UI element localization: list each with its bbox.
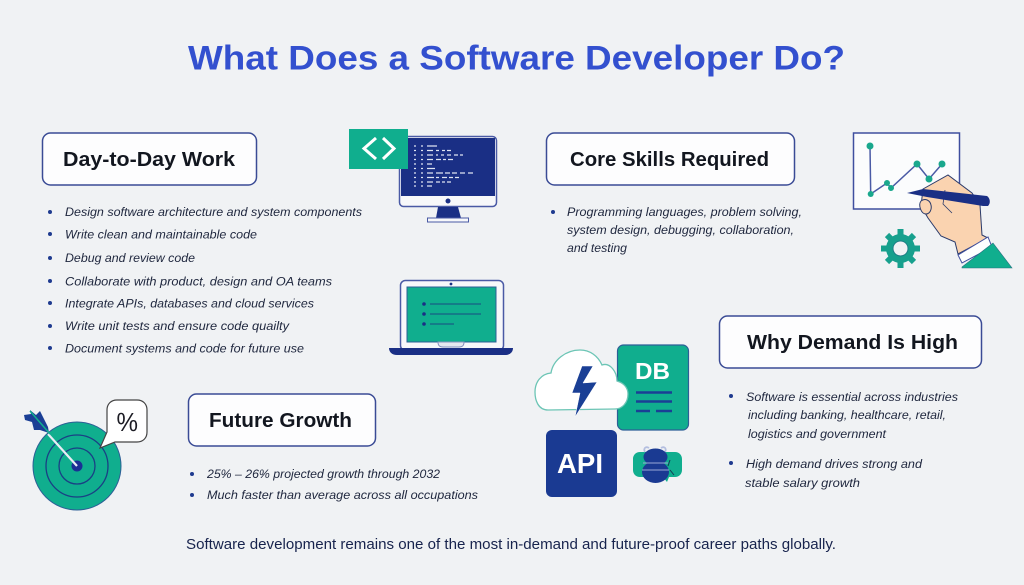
- panel: day-to-day work: [42, 133, 362, 356]
- bullet: salary growth: [729, 457, 923, 490]
- icon: cloud, database, API and bug: API: [557, 448, 603, 479]
- heading: future growth: Future Growth: [209, 409, 352, 432]
- bullet list: daily tasks: Collaborate with product, design and OA teams: [65, 274, 332, 288]
- icon: target with arrow and percent bubble: %: [116, 407, 138, 437]
- bullet list: growth facts: [190, 467, 478, 502]
- bullet: skills list: system design, debugging, collaboration,: [567, 223, 794, 237]
- panel: core skills required: [546, 133, 802, 255]
- heading: why demand is high: Why Demand Is High: [747, 331, 958, 354]
- bullet list: growth facts: Much faster than average across all occupations: [207, 488, 478, 502]
- heading: core skills required: [546, 133, 794, 185]
- bullet: salary growth: stable salary growth: [745, 476, 860, 490]
- heading: day-to-day work: Day-to-Day Work: [63, 148, 236, 171]
- bullet: industries: Software is essential across industries: [746, 390, 958, 404]
- panel: why demand is high: [720, 316, 982, 490]
- bullet list: daily tasks: Document systems and code for future use: [65, 342, 304, 356]
- bullet: industries: including banking, healthcare, retail,: [748, 408, 946, 422]
- heading: day-to-day work: [42, 133, 256, 185]
- icon: target with arrow and percent bubble: [24, 400, 147, 510]
- panel: future growth: [188, 394, 478, 502]
- icon: chart with hand and gear: [854, 133, 1012, 268]
- icon: cloud, database, API and bug: [535, 345, 688, 497]
- bullet list: daily tasks: Design software architecture and system components: [65, 205, 362, 219]
- bullet list: daily tasks: [48, 205, 362, 356]
- bullet list: daily tasks: Write unit tests and ensure code quailty: [65, 319, 290, 333]
- bullet: skills list: [551, 205, 802, 255]
- icon: laptop: [389, 280, 513, 355]
- icon: code monitor: [349, 129, 496, 222]
- closing statement: Software development remains one of the most in-demand and future-proof career paths globally.: [186, 537, 836, 553]
- heading: core skills required: Core Skills Required: [570, 148, 769, 171]
- bullet: skills list: Programming languages, problem solving,: [567, 205, 802, 219]
- heading: future growth: [188, 394, 376, 446]
- bullet list: growth facts: 25% – 26% projected growth through 2032: [206, 467, 440, 481]
- title: What Does a Software Developer Do?: [188, 40, 845, 78]
- bullet list: daily tasks: Debug and review code: [65, 251, 195, 265]
- bullet list: daily tasks: Integrate APIs, databases and cloud services: [65, 296, 314, 310]
- bullet: skills list: and testing: [567, 241, 627, 255]
- bullet: industries: logistics and government: [748, 427, 887, 441]
- gear: [881, 229, 920, 268]
- bullet: salary growth: High demand drives strong and: [746, 457, 923, 471]
- icon: cloud, database, API and bug: DB: [635, 358, 670, 384]
- heading: why demand is high: [720, 316, 982, 368]
- bullet: industries: [729, 390, 958, 441]
- bullet list: daily tasks: Write clean and maintainable code: [65, 228, 257, 242]
